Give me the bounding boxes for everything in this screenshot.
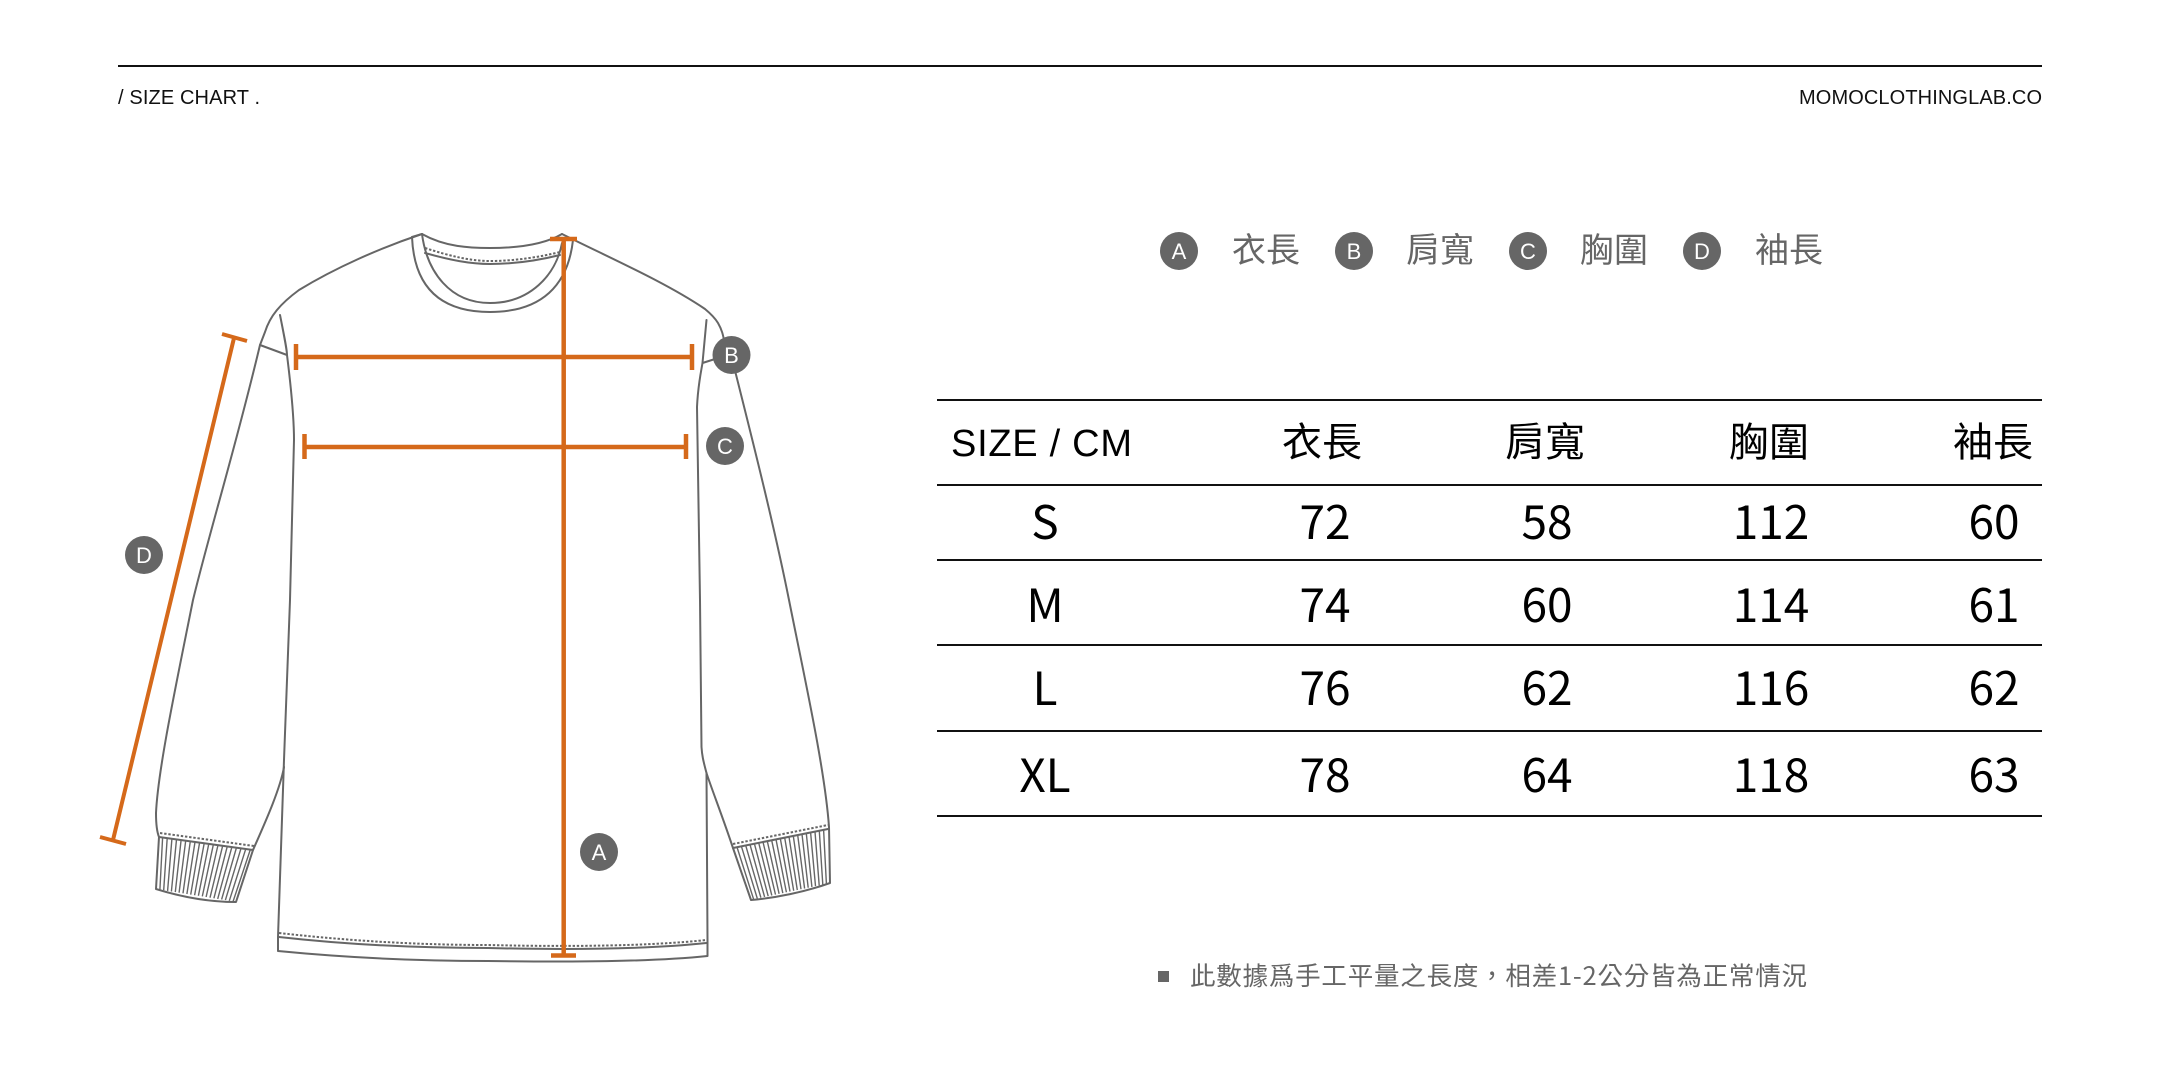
row M: 60 (1521, 570, 1573, 636)
table header row: SIZE / CM (951, 423, 1132, 465)
hem (279, 933, 706, 949)
measurement line D: sleeve length (100, 334, 247, 844)
row S (1031, 487, 2020, 553)
badge A on diagram: A (592, 840, 607, 865)
row XL: 118 (1733, 740, 1809, 806)
legend item B: B (1347, 239, 1361, 264)
measurement line A: body length (550, 239, 577, 956)
badge B on diagram (712, 336, 750, 374)
legend item C: C (1520, 239, 1536, 264)
left cuff (156, 833, 254, 902)
header right caption: MOMOCLOTHINGLAB.CO (1799, 87, 2042, 109)
row S: 112 (1733, 487, 1809, 553)
badge A on diagram (580, 833, 618, 871)
row XL: 63 (1968, 740, 2020, 806)
badge B on diagram: B (724, 343, 739, 368)
row XL: 64 (1521, 740, 1573, 806)
row M: 114 (1733, 570, 1809, 636)
row S: S (1031, 487, 1059, 553)
size table (937, 400, 2042, 816)
legend item A (1160, 223, 1300, 272)
badge C on diagram (706, 427, 744, 465)
row M: 74 (1299, 570, 1351, 636)
table header row: 胸圍 (1729, 410, 1809, 468)
table header row: 肩寬 (1505, 410, 1585, 468)
row S: 72 (1299, 487, 1351, 553)
legend item B: 肩寬 (1406, 223, 1474, 272)
badge D on diagram (125, 536, 163, 574)
legend item A: 衣長 (1232, 223, 1300, 272)
footnote: 此數據爲手工平量之長度，相差1-2公分皆為正常情況 (1190, 956, 1807, 993)
collar (412, 234, 573, 312)
row XL (1019, 740, 2020, 806)
row S: 58 (1521, 487, 1573, 553)
row M: 61 (1968, 570, 2020, 636)
legend (1160, 223, 1823, 272)
legend item D: D (1694, 239, 1710, 264)
row S: 60 (1968, 487, 2020, 553)
legend item B (1335, 223, 1474, 272)
measurement line C: chest (304, 434, 686, 459)
row L: 116 (1733, 653, 1809, 719)
row M: M (1026, 570, 1064, 636)
row XL: 78 (1299, 740, 1351, 806)
row L (1033, 653, 2020, 719)
icon: shirt outline (156, 234, 830, 961)
table header row: 袖長 (1953, 410, 2033, 468)
legend item C (1509, 223, 1648, 272)
legend item A: A (1172, 239, 1187, 264)
legend item D: 袖長 (1755, 223, 1823, 272)
badge C on diagram: C (717, 434, 733, 459)
row M (1026, 570, 2020, 636)
row L: 76 (1299, 653, 1351, 719)
table header row (951, 410, 2033, 468)
row L: L (1033, 653, 1057, 719)
row L: 62 (1968, 653, 2020, 719)
right cuff (733, 825, 828, 899)
badge D on diagram: D (136, 543, 152, 568)
row L: 62 (1521, 653, 1573, 719)
table header row: 衣長 (1282, 410, 1362, 468)
garment diagram: long sleeve tee with measurements (100, 234, 830, 961)
legend item C: 胸圍 (1580, 223, 1648, 272)
legend item D (1683, 223, 1823, 272)
header: rule and captions (118, 65, 2042, 109)
header left caption: / SIZE CHART . (118, 87, 260, 109)
measurement line B: shoulder width (296, 344, 692, 370)
row XL: XL (1019, 740, 1071, 806)
